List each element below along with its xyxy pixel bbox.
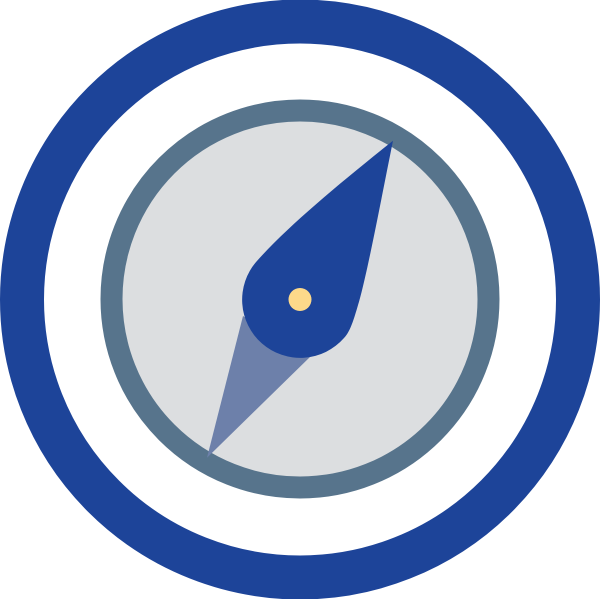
needle north pointer: [242, 141, 393, 358]
compass dial: [112, 110, 488, 488]
needle south pointer: [207, 316, 311, 458]
needle center pin: [288, 288, 312, 311]
